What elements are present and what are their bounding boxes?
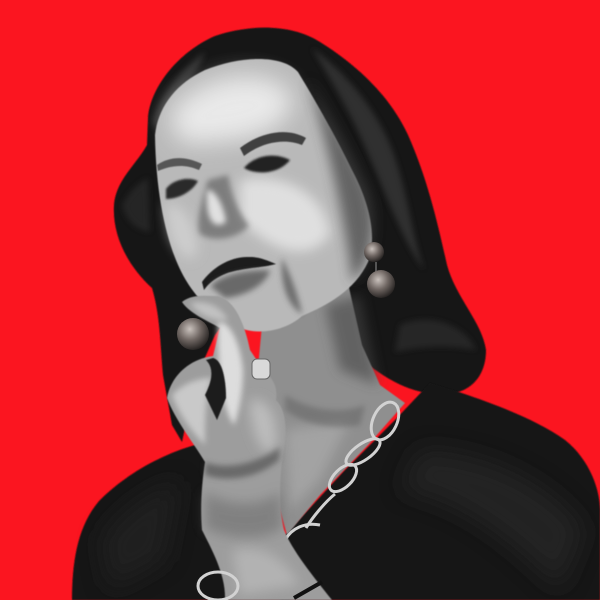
- black jacket: [72, 383, 600, 600]
- ring: [252, 359, 270, 379]
- mouth: [202, 257, 276, 290]
- nose highlight: [207, 190, 226, 225]
- hair: [114, 28, 486, 442]
- earrings: [177, 242, 395, 350]
- lower chain link: [198, 572, 238, 600]
- neck and chest: [255, 270, 405, 535]
- left eyebrow: [157, 158, 202, 171]
- face: [155, 59, 374, 331]
- gap between fingers: [205, 358, 226, 420]
- right eyebrow: [240, 132, 306, 156]
- lower lip shadow: [210, 270, 270, 298]
- cheek fold: [282, 258, 302, 314]
- right eye: [244, 156, 290, 172]
- nose shadow: [198, 175, 249, 239]
- chain necklace: [285, 398, 404, 540]
- left eye: [166, 179, 198, 199]
- bracelet: [294, 582, 322, 598]
- hand: [167, 296, 332, 600]
